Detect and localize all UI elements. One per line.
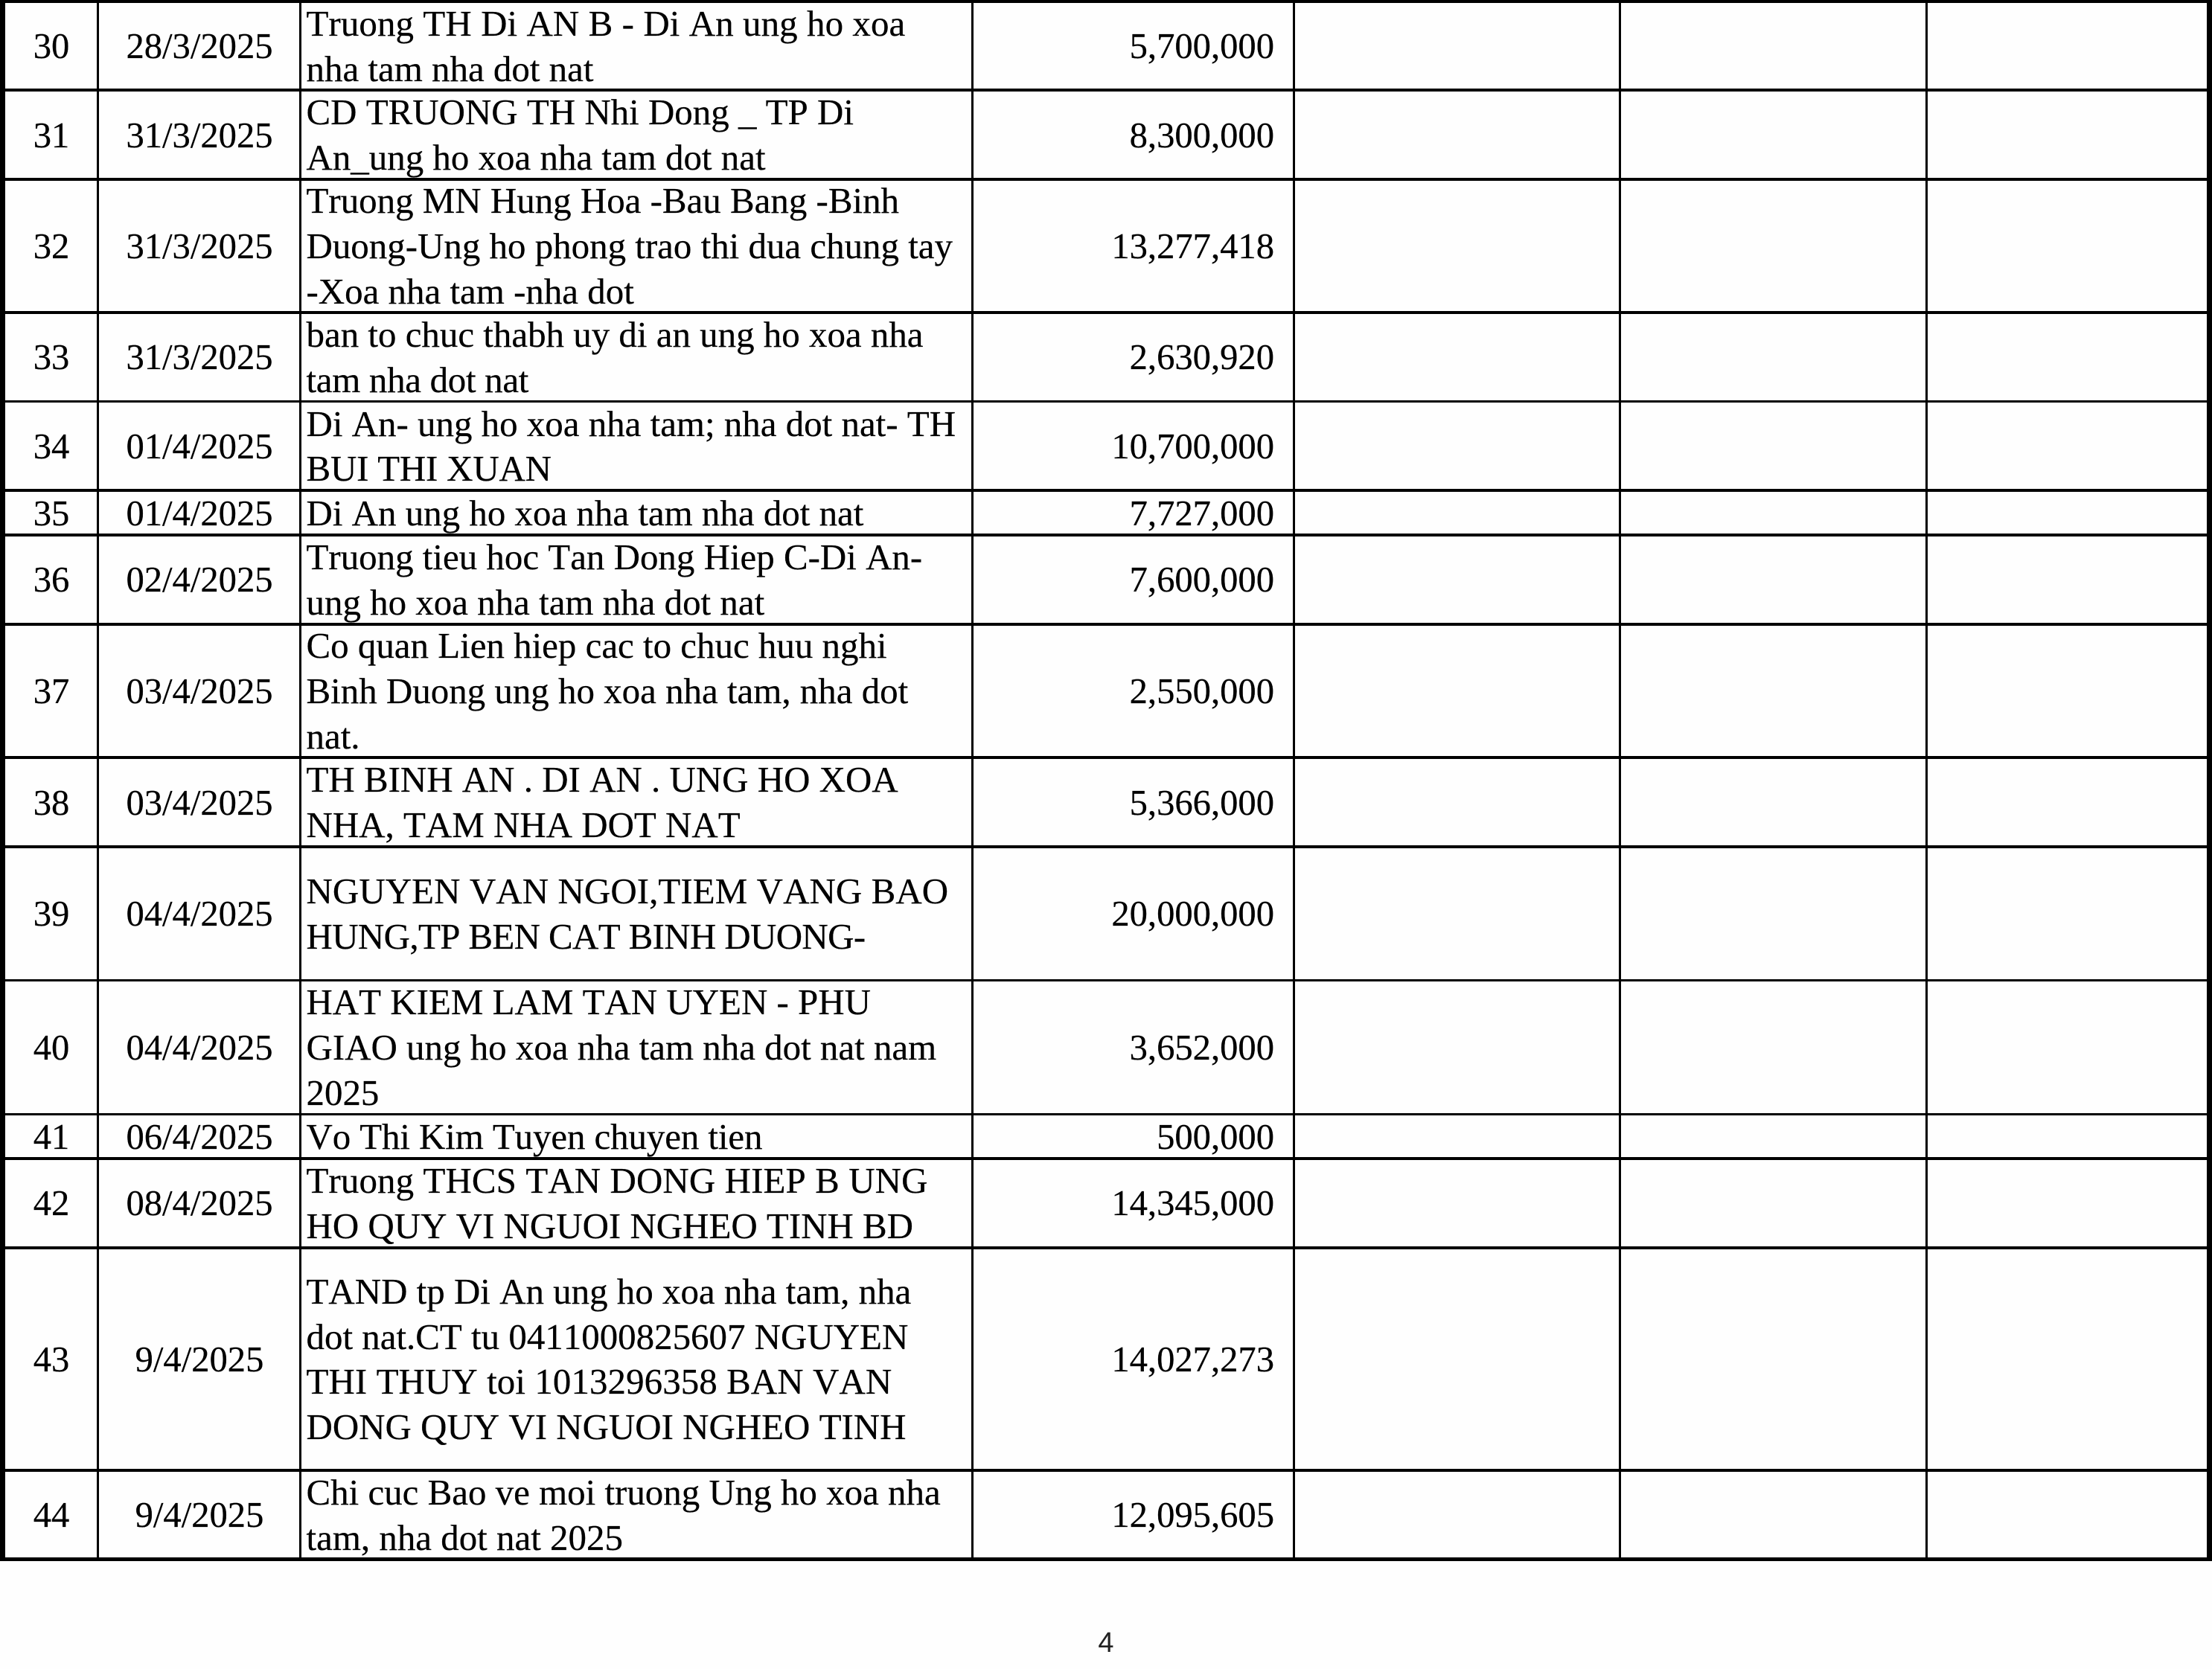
date 08/4/2025: 08/4/2025	[126, 1183, 273, 1223]
row number 40: 40	[33, 1028, 69, 1068]
row number 36: 36	[33, 560, 69, 600]
amount row 42: 14,345,000	[1111, 1183, 1274, 1223]
amount row 34: 10,700,000	[1111, 426, 1274, 467]
row number 38: 38	[33, 783, 69, 823]
row number 41: 41	[33, 1117, 69, 1157]
amount row 38: 5,366,000	[1130, 783, 1274, 823]
amount row 33: 2,630,920	[1130, 337, 1274, 377]
description row 44: Chi cuc Bao ve moi truong Ung ho xoa nha	[307, 1472, 941, 1513]
amount row 44: 12,095,605	[1111, 1495, 1274, 1535]
description row 32: Truong MN Hung Hoa -Bau Bang -Binh	[307, 180, 899, 221]
description row 40: HAT KIEM LAM TAN UYEN - PHU	[307, 981, 871, 1022]
row number 39: 39	[33, 894, 69, 934]
table row 42	[33, 1160, 1274, 1246]
date 31/3/2025: 31/3/2025	[126, 226, 273, 266]
description row 37	[307, 625, 908, 757]
table row 37	[33, 625, 1274, 757]
table row 40	[33, 981, 1274, 1113]
description row 37: Co quan Lien hiep cac to chuc huu nghi	[307, 625, 887, 666]
table row 35	[33, 493, 1274, 534]
date 9/4/2025: 9/4/2025	[135, 1495, 263, 1535]
date 04/4/2025: 04/4/2025	[126, 894, 273, 934]
description row 34: BUI THI XUAN	[307, 448, 552, 489]
description row 30: nha tam nha dot nat	[307, 48, 593, 89]
description row 38: NHA, TAM NHA DOT NAT	[307, 804, 741, 845]
table row 43	[33, 1271, 1274, 1447]
row number 31: 31	[33, 115, 69, 156]
row number 42: 42	[33, 1183, 69, 1223]
description row 42: Truong THCS TAN DONG HIEP B UNG	[307, 1160, 928, 1201]
date 31/3/2025: 31/3/2025	[126, 115, 273, 156]
description row 34	[307, 403, 956, 489]
description row 43: DONG QUY VI NGUOI NGHEO TINH	[307, 1406, 907, 1447]
description row 44: tam, nha dot nat 2025	[307, 1517, 623, 1558]
table row 32	[33, 180, 1274, 312]
description row 36: Truong tieu hoc Tan Dong Hiep C-Di An-	[307, 536, 922, 577]
description row 40: 2025	[307, 1072, 379, 1113]
row number 44: 44	[33, 1495, 69, 1535]
description row 31	[307, 92, 854, 178]
description row 33: tam nha dot nat	[307, 359, 528, 400]
date 31/3/2025: 31/3/2025	[126, 337, 273, 377]
description row 37: Binh Duong ung ho xoa nha tam, nha dot	[307, 670, 908, 711]
description row 42: HO QUY VI NGUOI NGHEO TINH BD	[307, 1205, 913, 1246]
row number 33: 33	[33, 337, 69, 377]
row number 43: 43	[33, 1339, 69, 1380]
description row 43: TAND tp Di An ung ho xoa nha tam, nha	[307, 1271, 911, 1312]
row number 32: 32	[33, 226, 69, 266]
description row 40	[307, 981, 936, 1113]
date 06/4/2025: 06/4/2025	[126, 1117, 273, 1157]
description row 30: Truong TH Di AN B - Di An ung ho xoa	[307, 3, 905, 44]
description row 33	[306, 314, 924, 400]
table row 30	[33, 3, 1274, 89]
date 28/3/2025: 28/3/2025	[126, 26, 273, 66]
description row 43: THI THUY toi 1013296358 BAN VAN	[307, 1361, 892, 1402]
description row 38: TH BINH AN . DI AN . UNG HO XOA	[307, 759, 898, 800]
page number: 4	[1098, 1627, 1114, 1659]
amount row 37: 2,550,000	[1130, 671, 1274, 711]
description row 41: Vo Thi Kim Tuyen chuyen tien	[307, 1116, 762, 1157]
row number 30: 30	[33, 26, 69, 66]
description row 32: -Xoa nha tam -nha dot	[307, 271, 634, 312]
amount row 36: 7,600,000	[1130, 560, 1274, 600]
table row 39	[33, 871, 1274, 957]
row number 37: 37	[33, 671, 69, 711]
description row 32	[307, 180, 953, 312]
date 9/4/2025: 9/4/2025	[135, 1339, 263, 1380]
date 01/4/2025: 01/4/2025	[126, 426, 273, 467]
table row 34	[33, 403, 1274, 489]
date 01/4/2025: 01/4/2025	[126, 493, 273, 534]
amount row 40: 3,652,000	[1130, 1028, 1274, 1068]
description row 33: ban to chuc thabh uy di an ung ho xoa nha	[307, 314, 924, 355]
description row 39: HUNG,TP BEN CAT BINH DUONG-	[307, 916, 866, 957]
description row 39: NGUYEN VAN NGOI,TIEM VANG BAO	[307, 871, 948, 912]
description row 43: dot nat.CT tu 0411000825607 NGUYEN	[307, 1316, 908, 1357]
table row 41	[33, 1116, 1274, 1157]
amount row 43: 14,027,273	[1111, 1339, 1274, 1380]
amount row 41: 500,000	[1157, 1117, 1274, 1157]
description row 32: Duong-Ung ho phong trao thi dua chung tay	[307, 225, 953, 266]
date 03/4/2025: 03/4/2025	[126, 783, 273, 823]
date 03/4/2025: 03/4/2025	[126, 671, 273, 711]
description row 31: CD TRUONG TH Nhi Dong _ TP Di	[307, 92, 854, 132]
description row 38	[307, 759, 898, 845]
amount row 32: 13,277,418	[1111, 226, 1274, 266]
table row 44	[33, 1472, 1274, 1558]
description row 36	[307, 536, 922, 623]
date 02/4/2025: 02/4/2025	[126, 560, 273, 600]
description row 37: nat.	[307, 716, 360, 757]
description row 34: Di An- ung ho xoa nha tam; nha dot nat- TH	[307, 403, 956, 444]
table row 33	[33, 314, 1274, 400]
table row 31	[33, 92, 1274, 178]
amount row 35: 7,727,000	[1130, 493, 1274, 534]
table row 38	[33, 759, 1274, 845]
description row 42	[307, 1160, 928, 1246]
row number 35: 35	[33, 493, 69, 534]
amount row 31: 8,300,000	[1130, 115, 1274, 156]
description row 44	[307, 1472, 941, 1558]
description row 30	[307, 3, 905, 89]
description row 43	[307, 1271, 911, 1447]
description row 39	[307, 871, 948, 957]
description row 40: GIAO ung ho xoa nha tam nha dot nat nam	[307, 1027, 936, 1068]
table row 36	[33, 536, 1274, 623]
date 04/4/2025: 04/4/2025	[126, 1028, 273, 1068]
description row 36: ung ho xoa nha tam nha dot nat	[307, 582, 764, 623]
amount row 39: 20,000,000	[1111, 894, 1274, 934]
row number 34: 34	[33, 426, 69, 467]
amount row 30: 5,700,000	[1130, 26, 1274, 66]
description row 35: Di An ung ho xoa nha tam nha dot nat	[307, 493, 863, 534]
description row 31: An_ung ho xoa nha tam dot nat	[307, 137, 766, 178]
